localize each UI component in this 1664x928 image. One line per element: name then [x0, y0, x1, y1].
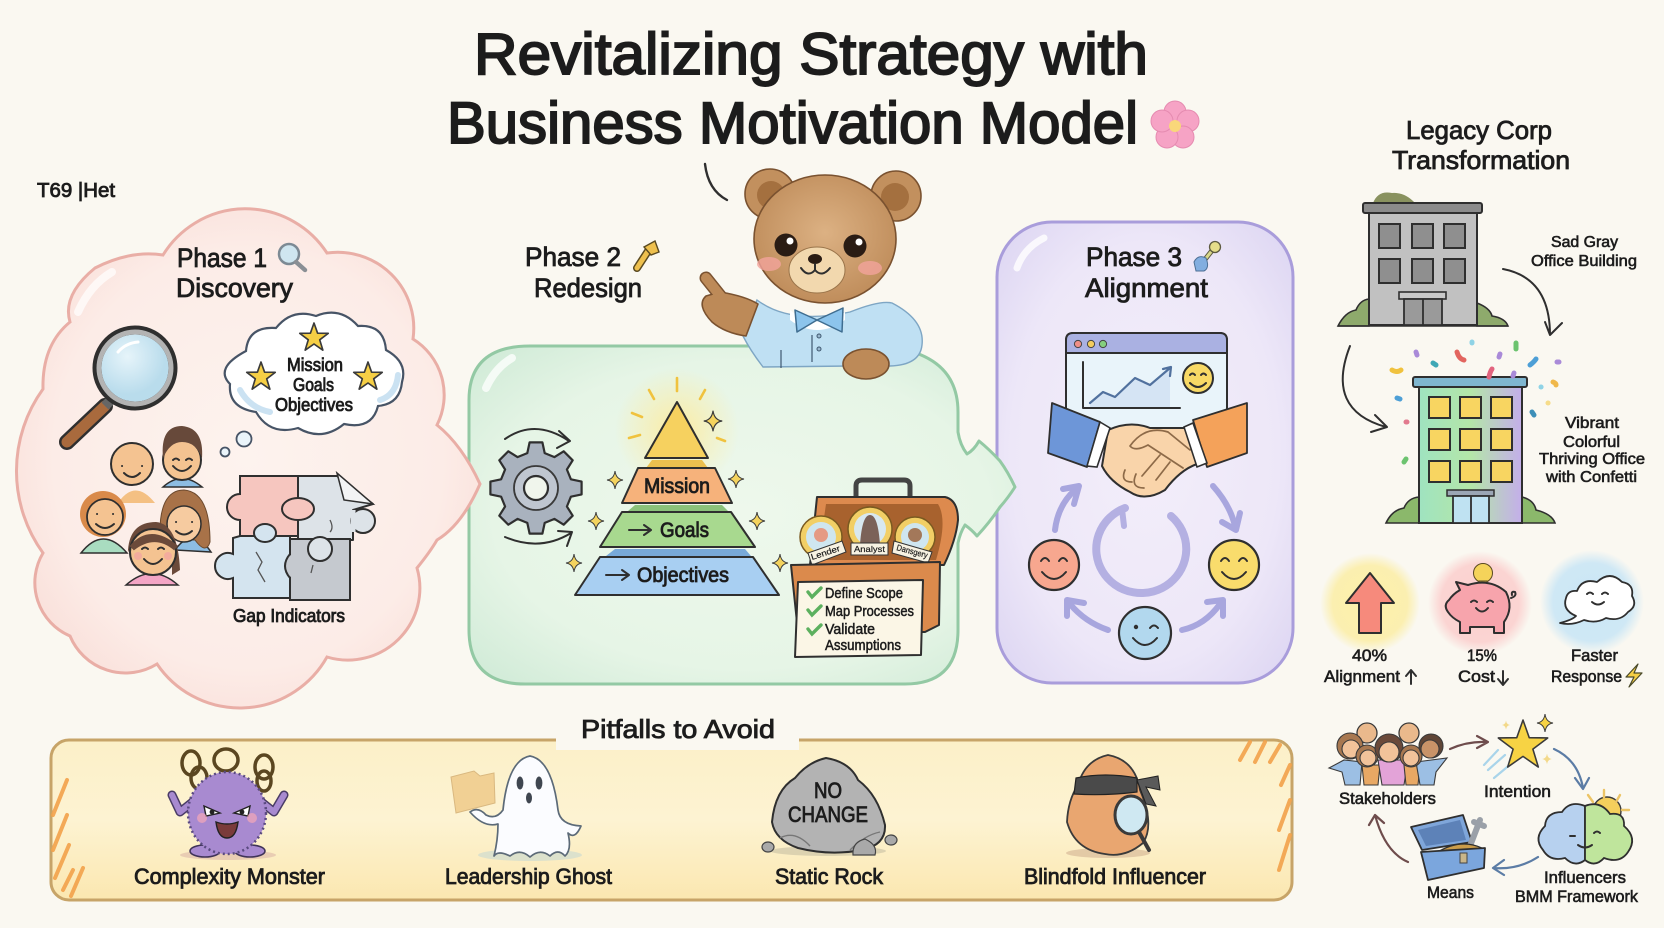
tier: goals [600, 512, 755, 547]
phase 1 cloud background [16, 209, 480, 708]
phase 2 heading: Redesign [534, 273, 642, 303]
icon: golden hammer [637, 241, 659, 268]
speech tick [705, 164, 727, 200]
cloud text: Objectives [275, 395, 353, 415]
gloss highlight [78, 272, 112, 312]
pitfall: leadership ghost [451, 756, 582, 861]
gray building label: Sad Gray [1551, 234, 1618, 251]
vibrant colorful building [1386, 377, 1555, 523]
stakeholders group: Stakeholders [1339, 789, 1436, 808]
panel: phase 1 discovery [16, 209, 480, 708]
pyramid apex [645, 402, 708, 458]
treasure chest with role badges and checklist [791, 480, 958, 657]
smiley faces [1029, 540, 1259, 659]
cloud text: Mission [287, 355, 343, 375]
phase 1 heading [176, 243, 293, 303]
smiley [1183, 363, 1213, 393]
shirt [743, 300, 922, 369]
complexity monster label: Complexity Monster [134, 864, 325, 889]
heading gap [556, 730, 799, 750]
thought cloud: mission goals objectives [220, 313, 403, 456]
stars [247, 323, 382, 389]
panel: pitfalls to avoid [51, 714, 1292, 900]
title [447, 22, 1148, 156]
means toolbox [1411, 815, 1485, 902]
vibrant building label: with Confetti [1545, 469, 1637, 486]
checklist note: Define Scope [825, 586, 903, 602]
arrow: stakeholders to intention [1450, 736, 1488, 749]
arrow: to vibrant building [1503, 269, 1562, 335]
checklist note: Assumptions [825, 638, 901, 654]
checklist note [795, 580, 923, 657]
tier: mission [622, 468, 732, 503]
gloss highlight [1017, 238, 1044, 268]
checklist note: Map Processes [825, 604, 914, 620]
cycle arrows [1055, 486, 1240, 630]
pitfalls background [51, 740, 1292, 900]
muzzle [789, 247, 845, 293]
icon: gear with arrows [490, 429, 582, 546]
tier: objectives: Objectives [637, 564, 729, 587]
cloud text: Goals [293, 375, 334, 395]
influencers half cloud: Influencers [1544, 868, 1626, 887]
role badges: Dansgery [895, 542, 930, 560]
phase 1 heading: Discovery [176, 273, 293, 303]
pyramid: mission goals objectives [566, 368, 788, 595]
puzzle gap indicators [215, 473, 375, 600]
gray building label [1531, 234, 1637, 270]
pointing arm and paw [702, 278, 758, 336]
thought bubbles [220, 432, 252, 456]
arrow: intention to influencers [1554, 749, 1589, 789]
transformation heading: Legacy Corp [1406, 115, 1552, 145]
gap indicators label: Gap Indicators [233, 606, 345, 626]
small corner label: T69 |Het [37, 180, 115, 202]
phase 3 background [997, 222, 1293, 683]
metric: 40% alignment: 40% [1352, 646, 1387, 665]
icon: speech cloud [1560, 576, 1634, 624]
head [754, 175, 896, 303]
role badges: Analyst [854, 544, 886, 554]
icon: pink flower [1151, 101, 1199, 148]
folder [451, 771, 495, 813]
icon: large magnifying glass [67, 330, 173, 442]
leadership ghost label: Leadership Ghost [445, 864, 612, 889]
role badges: Lender [810, 543, 841, 562]
arrow: means to stakeholders [1369, 815, 1408, 862]
phase 3 heading [1085, 242, 1208, 303]
gloss highlight [486, 358, 512, 388]
pitfalls heading: Pitfalls to Avoid [581, 714, 775, 744]
icon: key wrench [1194, 242, 1220, 271]
icon: red up arrow [1346, 573, 1394, 633]
phase 3 heading: Alignment [1085, 273, 1208, 303]
influencers half cloud: BMM Framework [1515, 887, 1638, 906]
sparkles [566, 411, 788, 572]
phase 1 heading: Phase 1 [177, 243, 267, 273]
panel: phase 2 redesign [469, 241, 1015, 684]
vibrant building label [1539, 415, 1645, 486]
icon: small magnifier [279, 244, 305, 270]
shirt buttons [817, 334, 821, 351]
blindfold influencer label: Blindfold Influencer [1024, 864, 1206, 889]
icon: lightning bolt [1626, 664, 1642, 687]
eyes [774, 234, 866, 258]
metric: faster response [1540, 550, 1644, 687]
metric: 15% cost: 15% [1467, 646, 1497, 665]
confetti [1392, 342, 1559, 462]
gray office building [1338, 192, 1508, 326]
phase 3 heading: Phase 3 [1086, 242, 1182, 272]
phase 2 heading: Phase 2 [525, 242, 621, 272]
phase 2 heading [525, 242, 642, 303]
panel: legacy corp transformation [1338, 115, 1645, 523]
pitfall: static rock: NO [814, 778, 842, 803]
ears [745, 169, 921, 221]
pitfall: static rock [762, 758, 897, 856]
panel: phase 3 alignment [997, 222, 1293, 683]
static rock label: Static Rock [775, 864, 884, 889]
role badges [800, 507, 935, 565]
warning stripes [53, 742, 1290, 896]
metric: faster response: Faster [1571, 646, 1618, 665]
transformation heading [1392, 115, 1570, 175]
icon: piggy bank [1446, 564, 1516, 633]
intention star: Intention [1484, 782, 1551, 801]
intention star [1484, 714, 1553, 801]
browser window with growth chart [1066, 333, 1227, 433]
metric: 15% cost: Cost [1458, 667, 1495, 686]
tier: goals: Goals [660, 519, 709, 542]
metric: 40% alignment [1320, 553, 1420, 686]
bow tie [795, 308, 843, 332]
diagram: BMM framework cycle [1329, 714, 1638, 906]
cloud text [275, 355, 353, 415]
arrow: transformation curve [1343, 346, 1387, 432]
tier: objectives [575, 557, 779, 595]
blush [757, 257, 882, 275]
vibrant building label: Thriving Office [1539, 451, 1645, 468]
title: Business Motivation Model [447, 91, 1138, 156]
people group [80, 426, 211, 585]
pitfall: static rock: CHANGE [788, 802, 868, 827]
handshake [1048, 403, 1247, 497]
stakeholders group [1329, 723, 1447, 808]
vibrant building label: Colorful [1563, 434, 1620, 451]
title: Revitalizing Strategy with [474, 22, 1148, 87]
influencers half cloud [1515, 790, 1638, 906]
transformation heading: Transformation [1392, 145, 1570, 175]
nose and mouth [801, 254, 830, 274]
bear mascot [702, 164, 922, 379]
means toolbox: Means [1427, 883, 1474, 902]
resting paw [843, 349, 889, 379]
metric: faster response: Response [1551, 667, 1622, 686]
checklist note: Validate [825, 622, 875, 638]
metric: 15% cost [1428, 551, 1532, 686]
pitfall: complexity monster [172, 749, 284, 860]
tier: mission: Mission [644, 475, 710, 498]
pitfall: blindfold influencer [1066, 755, 1160, 858]
metric: 40% alignment: Alignment [1324, 667, 1400, 686]
gray building label: Office Building [1531, 253, 1637, 270]
phase 2 arrow panel background [469, 346, 1015, 684]
arrow: influencers to means [1493, 857, 1538, 875]
vibrant building label: Vibrant [1565, 415, 1620, 432]
